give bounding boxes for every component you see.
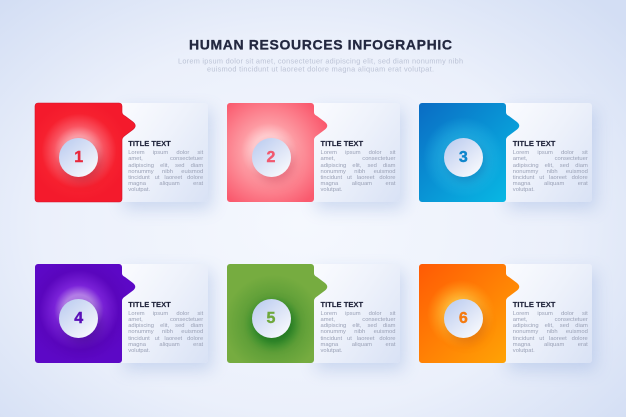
- text panel 3: [504, 103, 592, 202]
- body text 1: magna aliquam erat: [128, 181, 203, 187]
- panel: card 3: [419, 103, 602, 215]
- body text 2: nonummy nibh euismod: [320, 169, 396, 175]
- panel: card 1: [34, 102, 219, 216]
- body text 5: magna aliquam erat: [320, 342, 396, 348]
- colored tab 3: [419, 103, 520, 202]
- number circle 2: 2: [267, 149, 275, 166]
- body text 3: magna aliquam erat: [513, 181, 588, 187]
- panel: card 2: [227, 103, 411, 216]
- title: HUMAN RESOURCES INFOGRAPHIC: [189, 36, 452, 52]
- number circle 4: 4: [74, 310, 83, 326]
- number circle 6: [444, 298, 483, 338]
- body text 4: amet, consectetuer: [128, 317, 203, 323]
- colored tab 5: [227, 264, 328, 363]
- body text 1: amet, consectetuer: [128, 156, 203, 162]
- body text 2: [320, 150, 396, 193]
- body text 5: amet, consectetuer: [320, 317, 396, 323]
- colored tab 4: [35, 264, 136, 363]
- body text 1: nonummy nibh euismod: [128, 169, 203, 175]
- body text 6: Lorem ipsum dolor sit: [513, 311, 588, 317]
- body text 2: volutpat.: [320, 187, 342, 193]
- body text 4: tincidunt ut laoreet dolore: [128, 336, 203, 342]
- title text 1: TITLE TEXT: [128, 139, 171, 148]
- panel: card 4: [35, 264, 219, 376]
- body text 5: nonummy nibh euismod: [320, 329, 396, 335]
- body text 4: nonummy nibh euismod: [128, 329, 203, 335]
- number circle 5: [252, 298, 290, 338]
- panel: card 6: [419, 264, 602, 376]
- number circle 1: 1: [74, 149, 83, 166]
- body text 2: adipiscing elit, sed diam: [320, 162, 396, 168]
- body text 3: Lorem ipsum dolor sit: [513, 150, 588, 156]
- number circle 4: [59, 298, 98, 338]
- body text 6: amet, consectetuer: [513, 317, 588, 323]
- title text 5: TITLE TEXT: [320, 300, 363, 308]
- panel: card 5: [227, 264, 410, 376]
- body text 1: [128, 150, 204, 193]
- body text 1: adipiscing elit, sed diam: [128, 162, 203, 168]
- title text 3: TITLE TEXT: [513, 139, 555, 148]
- body text 3: tincidunt ut laoreet dolore: [513, 175, 588, 181]
- subtitle: [178, 56, 463, 74]
- body text 5: adipiscing elit, sed diam: [320, 323, 396, 329]
- number circle 5: 5: [267, 310, 275, 326]
- number circle 3: [444, 138, 483, 177]
- colored tab 6: [419, 264, 520, 363]
- number circle 2: [252, 138, 290, 177]
- body text 3: nonummy nibh euismod: [513, 169, 588, 175]
- body text 3: adipiscing elit, sed diam: [513, 162, 588, 168]
- body text 6: adipiscing elit, sed diam: [513, 323, 588, 329]
- body text 1: tincidunt ut laoreet dolore: [128, 175, 203, 181]
- body text 2: tincidunt ut laoreet dolore: [320, 175, 396, 181]
- body text 5: tincidunt ut laoreet dolore: [320, 336, 396, 342]
- number circle 3: 3: [459, 149, 468, 166]
- body text 5: volutpat.: [320, 348, 342, 354]
- text panel 6: [504, 264, 592, 363]
- body text 5: Lorem ipsum dolor sit: [320, 311, 396, 317]
- body text 4: adipiscing elit, sed diam: [128, 323, 203, 329]
- number circle 6: 6: [459, 310, 468, 326]
- colored tab 1: [34, 102, 136, 202]
- body text 4: magna aliquam erat: [128, 342, 203, 348]
- body text 4: Lorem ipsum dolor sit: [128, 311, 203, 317]
- body text 6: nonummy nibh euismod: [513, 329, 588, 335]
- body text 6: tincidunt ut laoreet dolore: [513, 336, 588, 342]
- body text 3: [512, 150, 588, 193]
- title text 2: TITLE TEXT: [320, 139, 363, 148]
- body text 6: magna aliquam erat: [513, 342, 588, 348]
- body text 4: [128, 311, 204, 354]
- text panel 2: [312, 103, 400, 202]
- subtitle: Lorem ipsum dolor sit amet, consectetuer adipiscing elit, sed diam nonummy nibh: [178, 56, 463, 66]
- body text 6: volutpat.: [513, 348, 535, 354]
- subtitle: euismod tincidunt ut laoreet dolore magna aliquam erat volutpat.: [207, 64, 434, 74]
- body text 5: [320, 311, 396, 354]
- body text 2: magna aliquam erat: [320, 181, 396, 187]
- body text 3: amet, consectetuer: [513, 156, 588, 162]
- body text 3: volutpat.: [513, 187, 535, 193]
- body text 1: volutpat.: [128, 187, 150, 193]
- colored tab 2: [227, 103, 328, 202]
- title text 6: TITLE TEXT: [513, 300, 555, 308]
- body text 1: Lorem ipsum dolor sit: [128, 150, 203, 156]
- number circle 1: [59, 138, 98, 177]
- title text 4: TITLE TEXT: [128, 300, 171, 308]
- body text 2: amet, consectetuer: [320, 156, 396, 162]
- body text 4: volutpat.: [128, 348, 150, 354]
- text panel 5: [312, 264, 400, 363]
- header: [178, 36, 463, 74]
- body text 2: Lorem ipsum dolor sit: [320, 150, 396, 156]
- text panel 1: [120, 103, 208, 202]
- body text 6: [512, 311, 588, 354]
- text panel 4: [120, 264, 208, 363]
